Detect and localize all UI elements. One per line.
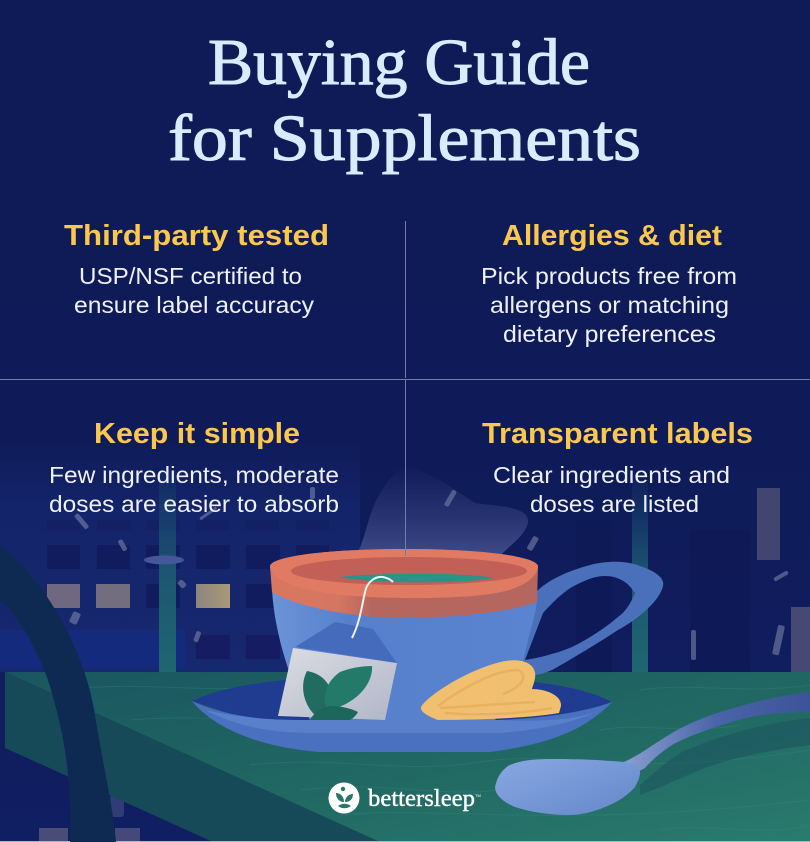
falling leaf flecks: [69, 487, 789, 817]
text block: USP/NSF certified to: [79, 263, 302, 289]
text block: Few ingredients, moderate: [49, 462, 339, 488]
table: [0, 672, 810, 842]
title: [168, 26, 641, 175]
logo: bettersleep: [328, 782, 481, 814]
inside of cup: [291, 557, 527, 585]
cup rim: [270, 549, 538, 618]
panel: keep it simple: [49, 418, 339, 517]
tag body: [278, 648, 397, 720]
spoon: [495, 692, 810, 815]
rim top surface: [270, 549, 538, 598]
divider lines: [0, 221, 810, 556]
chair back: [0, 545, 116, 842]
teacup: [270, 549, 538, 720]
text block: doses are easier to absorb: [49, 491, 339, 517]
heading: Transparent labels: [482, 418, 753, 450]
tag top: [295, 622, 397, 663]
text block: Pick products free from: [481, 263, 737, 289]
panel: transparent labels: [482, 418, 753, 517]
tea bag: [278, 577, 397, 720]
icon: plant in circle: [328, 782, 360, 814]
text block: Clear ingredients and: [493, 462, 730, 488]
steam: [358, 467, 528, 556]
heading: Allergies & diet: [502, 220, 722, 252]
text block: [74, 263, 315, 318]
title: Buying Guide: [208, 26, 590, 99]
trademark mark: TM: [475, 793, 481, 798]
tea: [340, 574, 493, 582]
scene: night city behind the table: [0, 440, 810, 841]
saucer: [192, 676, 612, 752]
cup body: [272, 590, 537, 720]
text block: [49, 462, 339, 517]
spoon handle: [622, 692, 810, 775]
cup handle: [520, 562, 663, 675]
text block: ensure label accuracy: [74, 292, 315, 318]
shadow of spoon: [640, 718, 810, 795]
string: [352, 577, 393, 638]
panel: third-party tested: [64, 220, 329, 318]
inner lip: [310, 580, 510, 594]
text block: dietary preferences: [503, 321, 716, 347]
wordmark: bettersleep: [368, 786, 475, 812]
text block: doses are listed: [530, 491, 699, 517]
spoon bowl: [495, 759, 640, 815]
text block: [493, 462, 730, 517]
heart cookie: [421, 660, 561, 720]
panel: allergies and diet: [481, 220, 737, 347]
heading: Third-party tested: [64, 220, 329, 252]
text block: [481, 263, 737, 347]
mint leaf: [303, 666, 372, 720]
text block: allergens or matching: [490, 292, 729, 318]
title: for Supplements: [168, 102, 641, 175]
heading: Keep it simple: [94, 418, 300, 450]
